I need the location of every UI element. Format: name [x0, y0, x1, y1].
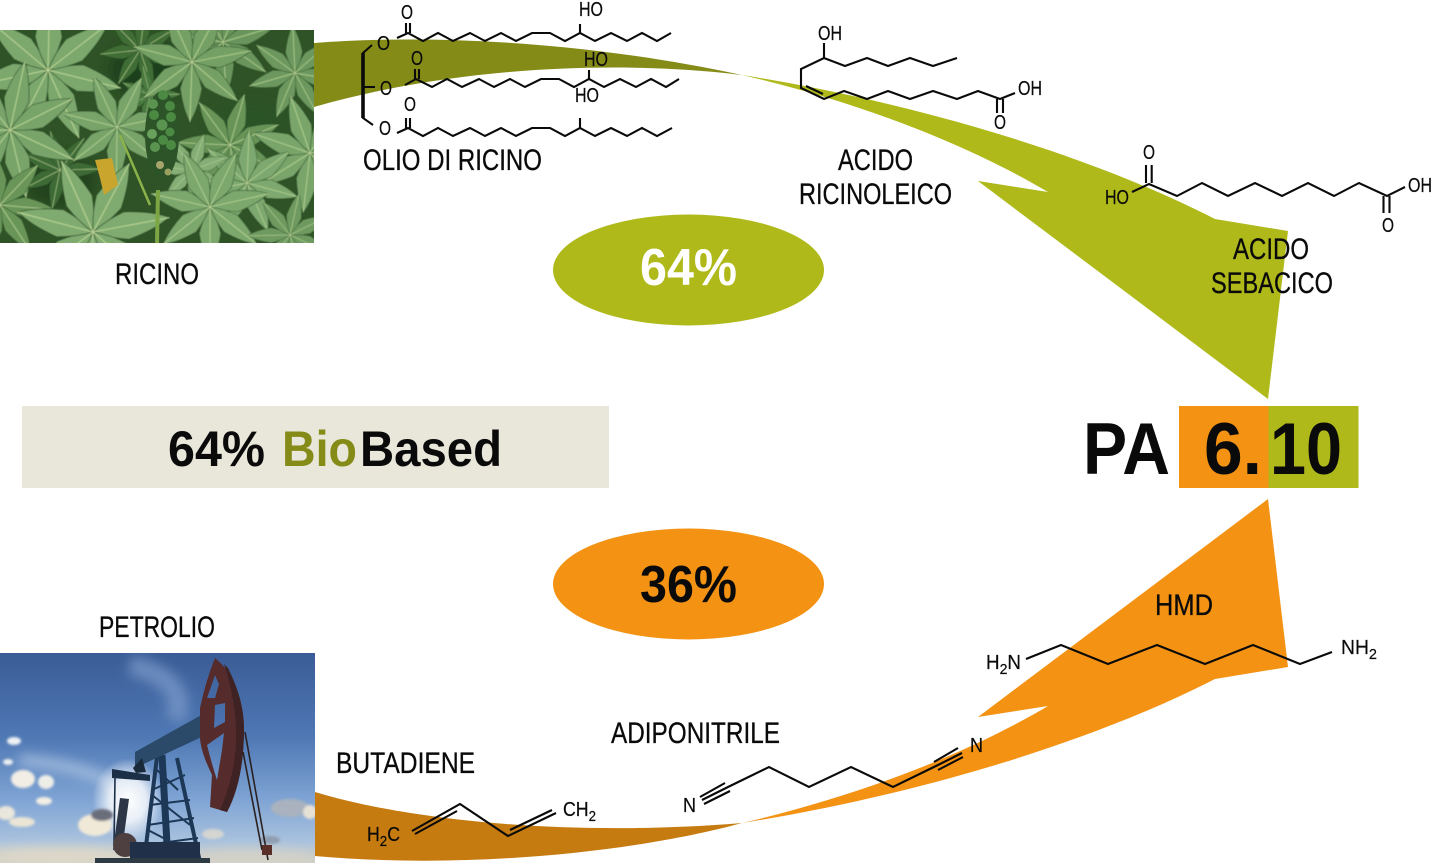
badge: 64%	[553, 214, 824, 326]
structure: ricinoleic acid: O	[994, 112, 1006, 134]
badge: 36%: 36%	[640, 556, 737, 614]
structure: castor oil triglyceride	[363, 0, 679, 140]
product label: PA 6.10: PA	[1083, 409, 1170, 490]
structure: hexamethylenediamine	[986, 637, 1377, 678]
label: hmd: HMD	[1155, 589, 1213, 622]
structure: ricinoleic acid: OH	[818, 23, 842, 45]
label: acido sebacico: SEBACICO	[1211, 267, 1333, 300]
product label: PA 6.10: 6.	[1204, 409, 1262, 490]
banner: 64% BioBased: 64%	[168, 421, 265, 477]
structure: butadiene: CH	[563, 799, 592, 821]
horse head	[200, 658, 244, 812]
structure: hexamethylenediamine: H	[986, 652, 1000, 674]
structure: sebacic acid: O	[1382, 215, 1394, 237]
structure: ricinoleic acid: OH	[1018, 78, 1042, 100]
structure: castor oil triglyceride: O	[404, 94, 416, 116]
flow arrow: fossil dark segment	[315, 792, 742, 861]
label: olio di ricino: OLIO DI RICINO	[363, 144, 542, 177]
banner: 64% BioBased: Based	[360, 421, 502, 477]
banner: 64% BioBased: Bio	[282, 421, 357, 477]
structure: hexamethylenediamine: 2	[1369, 646, 1377, 663]
badge: 36%	[553, 528, 824, 640]
structure: butadiene: 2	[380, 833, 387, 850]
label: acido sebacico	[1211, 233, 1333, 300]
cables	[243, 732, 268, 860]
structure: castor oil triglyceride: O	[401, 2, 413, 24]
structure: hexamethylenediamine: NH	[1341, 637, 1370, 659]
structure: butadiene: H	[367, 824, 381, 846]
photo: oil pump jack	[0, 653, 320, 863]
structure: butadiene	[367, 799, 596, 850]
badge: 64%: 64%	[640, 239, 737, 297]
structure: adiponitrile: N	[970, 735, 983, 757]
walking beam	[135, 716, 200, 766]
structure: butadiene: C	[387, 824, 400, 846]
label: acido sebacico: ACIDO	[1233, 233, 1309, 266]
label: petrolio: PETROLIO	[99, 611, 215, 644]
flow arrow: bio light segment to PA 6.10	[742, 75, 1288, 399]
product label: PA 6.10: 10	[1270, 409, 1342, 490]
label: butadiene: BUTADIENE	[336, 747, 475, 780]
flow arrow: fossil orange segment to PA 6.10	[742, 499, 1288, 823]
label: acido ricinoleico: ACIDO	[838, 144, 913, 177]
label: adiponitrile: ADIPONITRILE	[611, 717, 780, 750]
back beam and crank	[112, 769, 150, 781]
structure: hexamethylenediamine: 2	[1000, 661, 1007, 678]
structure: ricinoleic acid	[801, 23, 1042, 134]
banner: 64% BioBased	[22, 406, 609, 488]
flow arrow: bio source dark segment	[314, 39, 742, 107]
structure: castor oil triglyceride: HO	[584, 49, 608, 71]
structure: sebacic acid: O	[1143, 142, 1155, 164]
structure: adiponitrile: N	[683, 795, 696, 817]
structure: hexamethylenediamine: N	[1007, 652, 1021, 674]
photo: castor plant	[0, 30, 314, 243]
structure: castor oil triglyceride: O	[380, 78, 392, 100]
structure: adiponitrile	[683, 735, 983, 817]
structure: castor oil triglyceride: HO	[575, 85, 599, 107]
structure: butadiene: 2	[589, 808, 596, 825]
structure: castor oil triglyceride: O	[379, 118, 391, 140]
tower	[144, 755, 200, 862]
structure: castor oil triglyceride: O	[377, 33, 390, 55]
structure: sebacic acid: HO	[1105, 187, 1129, 209]
label: acido ricinoleico	[799, 144, 952, 211]
product label: PA 6.10	[1083, 406, 1358, 490]
structure: sebacic acid	[1105, 142, 1432, 237]
label: acido ricinoleico: RICINOLEICO	[799, 178, 952, 211]
label: ricino: RICINO	[115, 258, 199, 291]
structure: castor oil triglyceride: O	[411, 48, 423, 70]
